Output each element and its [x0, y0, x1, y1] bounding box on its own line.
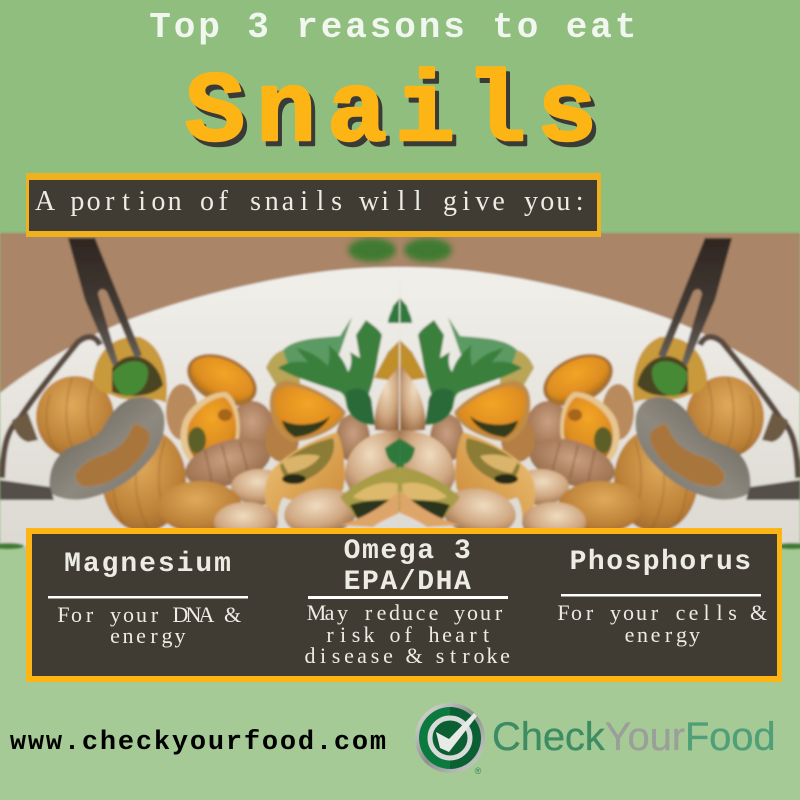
nutrient: phosphorus: For your cells & [557, 600, 767, 625]
logo icon [415, 703, 485, 776]
nutrient: magnesium: Magnesium [64, 549, 231, 580]
logo icon: ® [475, 766, 482, 776]
nutrient: omega 3: May reduce your [307, 600, 503, 625]
nutrient: omega 3: disease & stroke [304, 643, 510, 668]
green background bottom [0, 547, 800, 800]
website url: www.checkyourfood.com [10, 728, 386, 758]
snail photo (mirrored) [0, 233, 800, 549]
nutrient: magnesium [48, 549, 248, 648]
nutrient panel [26, 528, 782, 682]
nutrient: omega 3: EPA/DHA [344, 567, 471, 598]
nutrient: phosphorus [557, 547, 767, 647]
title word: Snails: Snails [185, 58, 597, 171]
nutrient: omega 3: Omega 3 [344, 536, 471, 567]
nutrient: omega 3: risk of heart [326, 622, 489, 647]
nutrient: magnesium: energy [110, 623, 186, 648]
title word: Snails: Snails [189, 63, 601, 176]
nutrient: omega 3 [304, 536, 510, 668]
nutrient: phosphorus: Phosphorus [570, 547, 751, 578]
intro box: A portion of snails will give you: [35, 186, 583, 217]
green background top [0, 0, 800, 233]
intro box [26, 173, 601, 237]
title line: Top 3 reasons to eat [149, 7, 636, 48]
nutrient: magnesium: For your DNA & [57, 602, 241, 627]
logo wordmark: CheckYourFood [492, 715, 775, 759]
nutrient: phosphorus: energy [625, 622, 700, 647]
